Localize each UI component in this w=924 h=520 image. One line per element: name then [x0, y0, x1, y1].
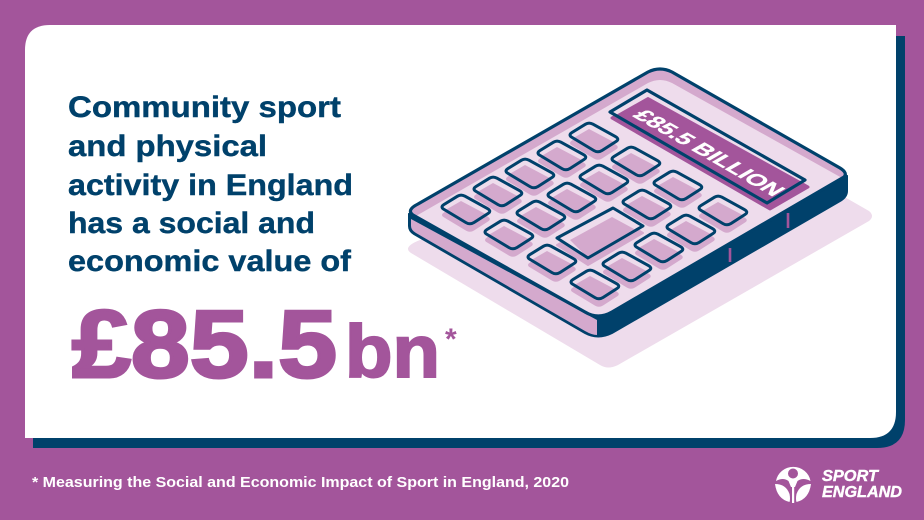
calculator side ticks: [730, 213, 788, 262]
big number: *: [445, 323, 457, 356]
calculator top face: [410, 69, 845, 316]
heading: [68, 91, 353, 278]
big number: £85.5: [72, 291, 337, 398]
calculator illustration: [408, 69, 872, 368]
logo: Sport England: [775, 467, 902, 503]
heading: Community sport: [68, 91, 341, 124]
logo wordmark: SPORT: [822, 468, 880, 485]
calculator ground shadow: [408, 160, 872, 368]
calculator body: [409, 70, 847, 336]
large key: [557, 208, 643, 265]
logo: Sport England: ENGLAND: [822, 484, 902, 501]
heading: activity in England: [68, 169, 353, 202]
panel: white card: [25, 25, 896, 438]
calculator front edge: [411, 219, 597, 335]
card shadow: [33, 36, 905, 448]
calculator display: [610, 90, 808, 209]
calculator keys: [442, 123, 747, 307]
big number: [72, 291, 457, 398]
heading: economic value of: [68, 245, 352, 278]
big number: bn: [345, 310, 440, 393]
logo icon: [775, 467, 811, 503]
heading: and physical: [68, 130, 267, 163]
heading: has a social and: [68, 207, 315, 240]
footnote: * Measuring the Social and Economic Impact of Sport in England, 2020: [32, 475, 569, 491]
calculator display: £85.5 BILLION: [628, 106, 791, 200]
